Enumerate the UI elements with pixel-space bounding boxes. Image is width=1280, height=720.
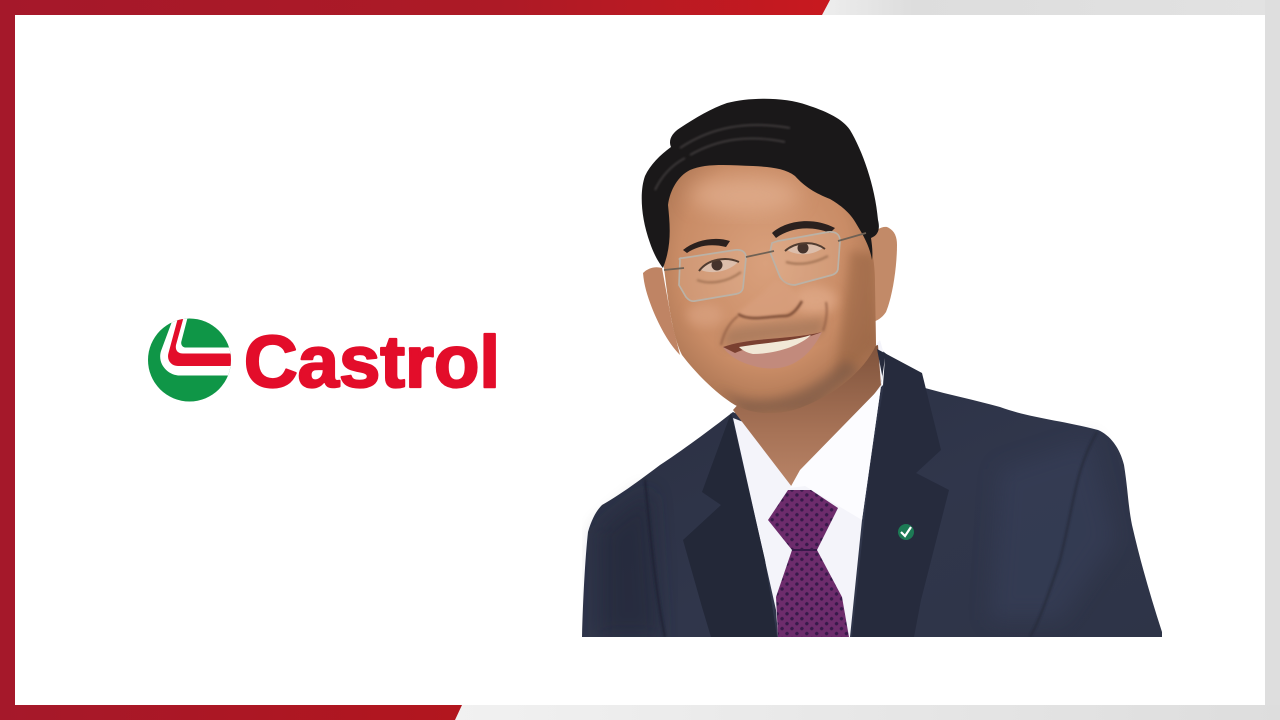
hair	[642, 99, 879, 268]
tie	[768, 490, 849, 637]
right lapel	[852, 349, 949, 637]
nose	[742, 280, 790, 316]
right eyebrow	[772, 221, 835, 238]
face shading	[687, 177, 876, 415]
suit jacket	[582, 349, 1162, 637]
left lapel	[683, 413, 777, 637]
collar tip	[790, 358, 885, 520]
left ear	[643, 267, 680, 355]
left eyebrow	[683, 239, 730, 253]
portrait of executive	[582, 99, 1162, 637]
suit shading	[600, 432, 1115, 637]
logo wordmark: Castrol	[244, 322, 500, 403]
nostril shadow	[738, 301, 802, 318]
Castrol logo	[148, 316, 500, 403]
mouth	[723, 332, 822, 369]
white shirt and collar	[733, 340, 885, 637]
right eye	[785, 242, 828, 264]
left eye	[697, 259, 741, 282]
glasses	[664, 232, 866, 301]
face	[663, 155, 876, 413]
hair highlights	[655, 125, 790, 190]
icon: Castrol roundel	[148, 318, 231, 402]
right ear	[870, 227, 897, 322]
smile folds	[721, 302, 827, 345]
neck	[733, 345, 881, 487]
tie knot line	[792, 549, 817, 551]
lapel pin	[898, 524, 914, 540]
